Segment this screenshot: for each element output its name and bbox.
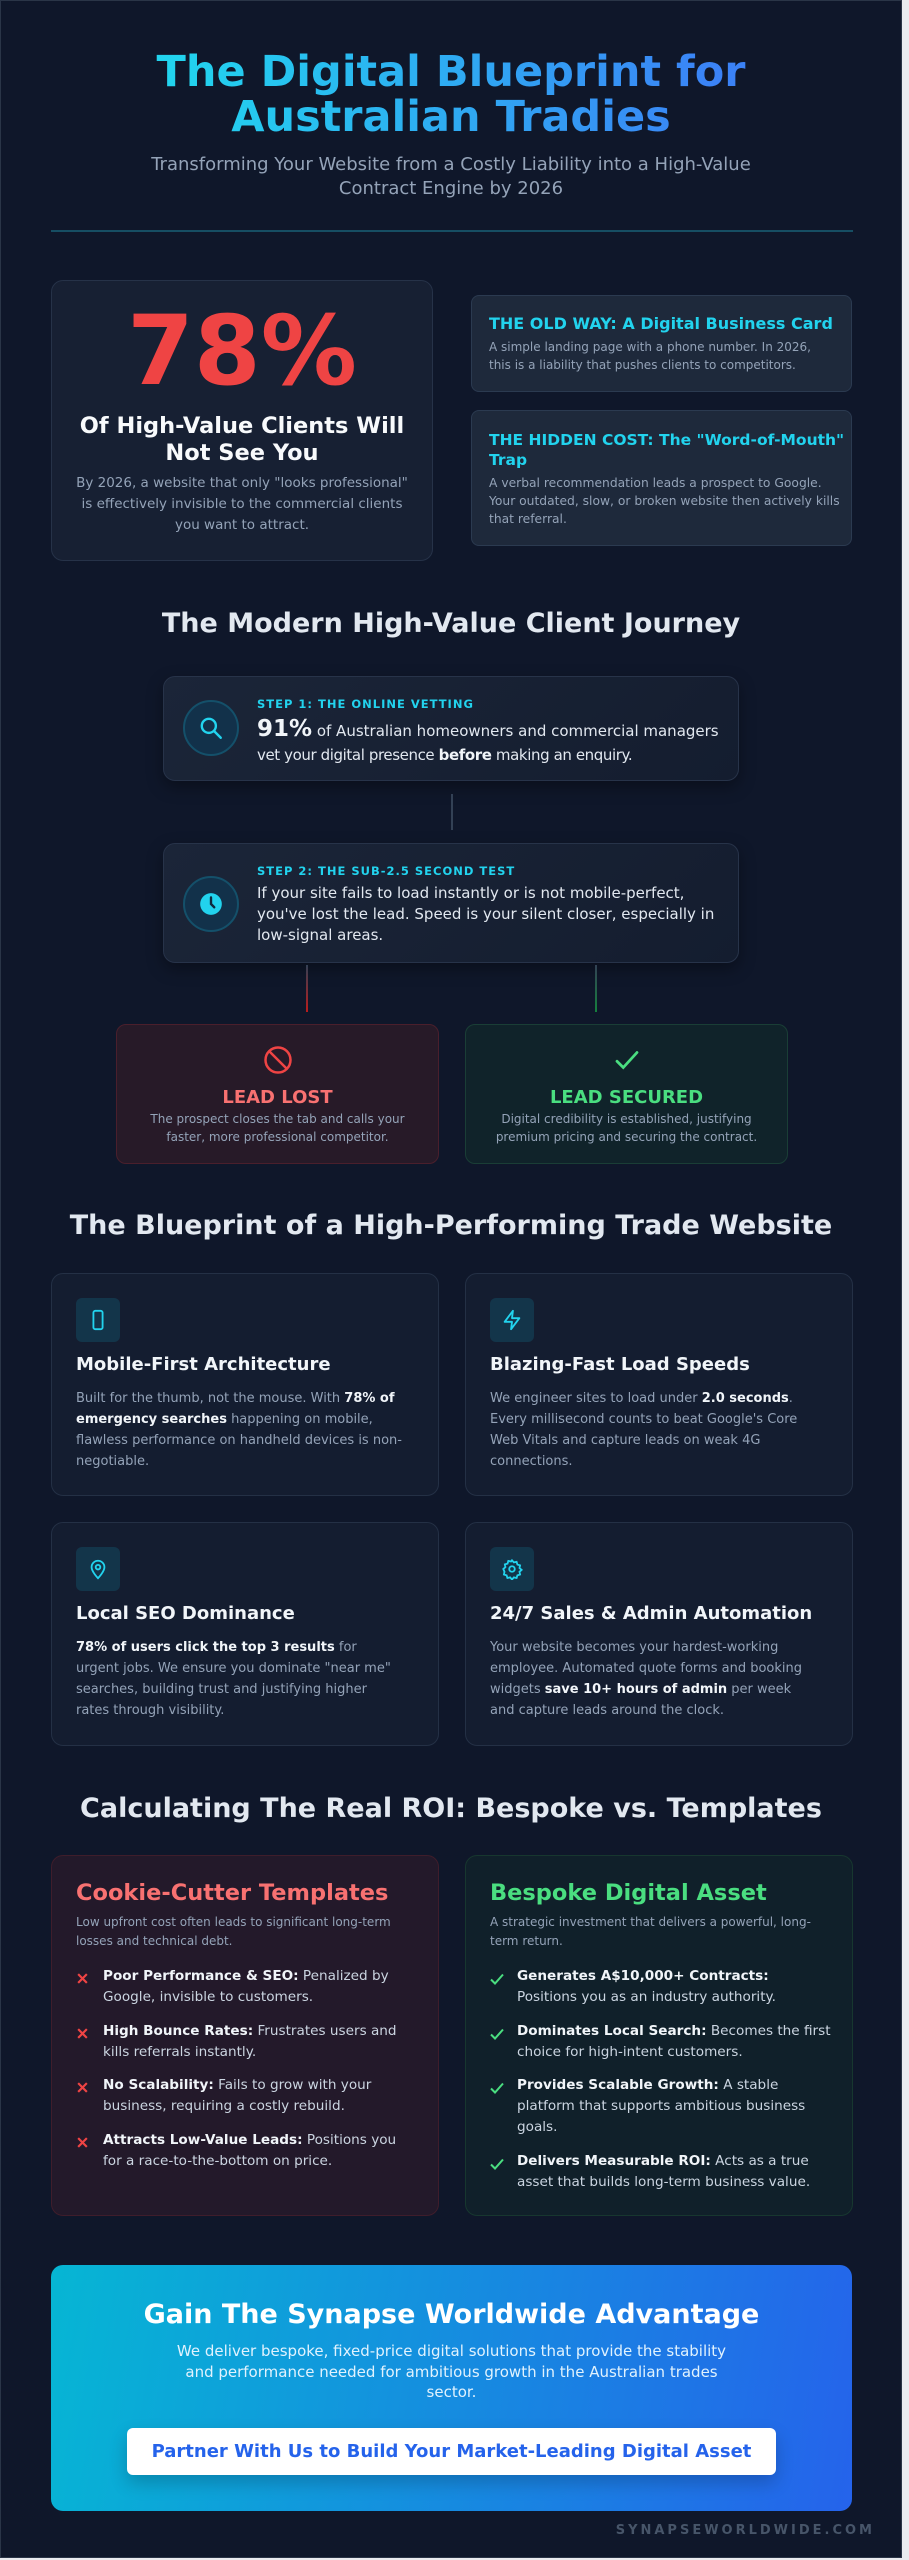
step 2 text: you've lost the lead. Speed is your silent closer, especially in: [257, 905, 714, 923]
speed text: Every millisecond counts to beat Google's Core: [490, 1412, 797, 1427]
stat heading: [80, 413, 404, 466]
lead secured text: [496, 1112, 757, 1144]
stat heading: Of High-Value Clients Will: [80, 413, 404, 439]
speed text: We engineer sites to load under 2.0 seconds.: [490, 1391, 793, 1406]
panel: templates: [51, 1855, 439, 2216]
mobile text: Built for the thumb, not the mouse. With 78% of: [76, 1391, 395, 1406]
hidden cost text: A verbal recommendation leads a prospect to Google.: [489, 476, 822, 490]
mobile text: [76, 1391, 402, 1469]
speed title: Blazing-Fast Load Speeds: [490, 1354, 750, 1375]
templates subtitle: losses and technical debt.: [76, 1934, 232, 1948]
big stat: 78%: [127, 295, 357, 407]
seo text: 78% of users click the top 3 results for: [76, 1640, 357, 1655]
arrow: to lead lost: [306, 965, 308, 1012]
templates list: kills referrals instantly.: [103, 2044, 256, 2060]
icon: search: [183, 700, 239, 756]
bespoke list: choice for high-intent customers.: [517, 2044, 743, 2060]
title: Australian Tradies: [231, 92, 671, 142]
cta button: [127, 2428, 776, 2475]
seo text: searches, building trust and justifying higher: [76, 1682, 367, 1697]
templates list: Poor Performance & SEO: Penalized by: [103, 1968, 389, 1984]
cta text: sector.: [427, 2383, 476, 2401]
old way text: this is a liability that pushes clients to competitors.: [489, 358, 796, 372]
step 2 text: low-signal areas.: [257, 926, 383, 944]
panel: lead secured: [465, 1024, 788, 1164]
old way text: A simple landing page with a phone number. In 2026,: [489, 340, 811, 354]
hidden cost text: [489, 476, 840, 526]
lead lost text: The prospect closes the tab and calls your: [150, 1112, 405, 1126]
panel: bespoke: [465, 1855, 853, 2216]
automation text: [490, 1640, 802, 1718]
bespoke subtitle: A strategic investment that delivers a powerful, long-: [490, 1915, 811, 1929]
speed text: connections.: [490, 1454, 573, 1469]
hidden cost heading: THE HIDDEN COST: The "Word-of-Mouth": [489, 431, 844, 449]
icon: check: [616, 1051, 638, 1070]
step 1 label: STEP 1: THE ONLINE VETTING: [257, 697, 474, 711]
mobile text: negotiable.: [76, 1454, 149, 1469]
automation text: Your website becomes your hardest-working: [490, 1640, 778, 1655]
hidden cost text: that referral.: [489, 512, 567, 526]
icon: gear: [490, 1547, 534, 1591]
panel: step 2: [163, 843, 739, 963]
footer: SYNAPSEWORLDWIDE.COM: [616, 2523, 875, 2538]
templates list: for a race-to-the-bottom on price.: [103, 2152, 332, 2168]
panel: call to action: [51, 2265, 852, 2511]
title: The Digital Blueprint for: [157, 47, 745, 97]
automation text: and capture leads around the clock.: [490, 1703, 724, 1718]
templates list: No Scalability: Fails to grow with your: [103, 2077, 371, 2093]
templates list: [78, 1968, 397, 2168]
seo text: [76, 1640, 391, 1718]
cta text: We deliver bespoke, fixed-price digital solutions that provide the stability: [177, 2342, 726, 2360]
bespoke list: Dominates Local Search: Becomes the first: [517, 2022, 831, 2038]
old way text: [489, 340, 811, 372]
templates subtitle: Low upfront cost often leads to significant long-term: [76, 1915, 391, 1929]
stat text: By 2026, a website that only "looks professional": [76, 475, 408, 491]
lead lost text: faster, more professional competitor.: [166, 1130, 389, 1144]
templates list: business, requiring a costly rebuild.: [103, 2098, 345, 2114]
title: [1, 50, 901, 140]
stat text: you want to attract.: [175, 517, 309, 533]
hidden cost heading: Trap: [489, 451, 527, 469]
cta button: Partner With Us to Build Your Market-Leading Digital Asset: [152, 2441, 751, 2462]
bespoke list: Delivers Measurable ROI: Acts as a true: [517, 2152, 809, 2168]
bespoke list: Generates A$10,000+ Contracts:: [517, 1968, 769, 1984]
bespoke subtitle: term return.: [490, 1934, 563, 1948]
heading: blueprint: The Blueprint of a High-Performing Trade Website: [70, 1210, 832, 1241]
icon: bolt: [490, 1298, 534, 1342]
lead lost text: [150, 1112, 405, 1144]
speed text: [490, 1391, 797, 1469]
old way heading: THE OLD WAY: A Digital Business Card: [489, 314, 833, 333]
panel: old way: [471, 295, 852, 392]
lead secured title: LEAD SECURED: [550, 1087, 703, 1108]
cta heading: Gain The Synapse Worldwide Advantage: [144, 2299, 759, 2330]
automation text: employee. Automated quote forms and booking: [490, 1661, 802, 1676]
heading: client journey: The Modern High-Value Client Journey: [162, 608, 740, 639]
templates subtitle: [76, 1915, 391, 1948]
panel: local seo: [51, 1522, 439, 1746]
mobile text: emergency searches happening on mobile,: [76, 1412, 373, 1427]
icon: pin: [76, 1547, 120, 1591]
seo title: Local SEO Dominance: [76, 1603, 295, 1624]
bespoke list: Positions you as an industry authority.: [517, 1989, 776, 2005]
speed text: Web Vitals and capture leads on weak 4G: [490, 1433, 760, 1448]
icon: clock: [183, 876, 239, 932]
bespoke list: goals.: [517, 2119, 557, 2135]
panel: lead lost: [116, 1024, 439, 1164]
automation title: 24/7 Sales & Admin Automation: [490, 1603, 812, 1624]
templates title: Cookie-Cutter Templates: [76, 1880, 388, 1906]
stat text: [76, 475, 408, 533]
step 1 text: [257, 716, 719, 764]
lead lost title: LEAD LOST: [222, 1087, 333, 1108]
heading: roi: Calculating The Real ROI: Bespoke vs. Templates: [80, 1793, 822, 1824]
step 2 label: STEP 2: THE SUB-2.5 SECOND TEST: [257, 864, 515, 878]
arrow: connector: [451, 794, 453, 830]
icon: ban: [264, 1046, 292, 1074]
mobile text: flawless performance on handheld devices is non-: [76, 1433, 402, 1448]
hidden cost heading: [489, 431, 844, 469]
panel: hidden cost: [471, 410, 852, 546]
step 2 text: If your site fails to load instantly or is not mobile-perfect,: [257, 884, 684, 902]
panel: step 1: [163, 676, 739, 781]
panel: mobile-first: [51, 1273, 439, 1496]
templates list: Attracts Low-Value Leads: Positions you: [103, 2132, 396, 2148]
seo text: urgent jobs. We ensure you dominate "near me": [76, 1661, 391, 1676]
bespoke list: Provides Scalable Growth: A stable: [517, 2077, 778, 2093]
subtitle: [151, 154, 751, 199]
templates list: High Bounce Rates: Frustrates users and: [103, 2022, 397, 2038]
stat heading: Not See You: [165, 440, 319, 466]
subtitle: Contract Engine by 2026: [339, 178, 563, 199]
panel: automation: [465, 1522, 853, 1746]
panel: 78% stat: [51, 280, 433, 561]
bespoke title: Bespoke Digital Asset: [490, 1880, 767, 1906]
cta text: and performance needed for ambitious growth in the Australian trades: [185, 2362, 718, 2380]
arrow: to lead secured: [595, 965, 597, 1012]
step 1 text: 91% of Australian homeowners and commercial managers: [257, 716, 719, 742]
icon: phone: [76, 1298, 120, 1342]
lead secured text: Digital credibility is established, justifying: [501, 1112, 752, 1126]
step 1 text: vet your digital presence before making an enquiry.: [257, 746, 632, 764]
bespoke list: [490, 1968, 831, 2190]
cta text: [177, 2342, 726, 2401]
seo text: rates through visibility.: [76, 1703, 224, 1718]
bespoke list: platform that supports ambitious business: [517, 2098, 805, 2114]
subtitle: Transforming Your Website from a Costly Liability into a High-Value: [151, 154, 751, 175]
stat text: is effectively invisible to the commercial clients: [82, 496, 402, 512]
lead secured text: premium pricing and securing the contract.: [496, 1130, 757, 1144]
automation text: widgets save 10+ hours of admin per week: [490, 1682, 791, 1697]
bespoke subtitle: [490, 1915, 811, 1948]
bespoke list: asset that builds long-term business value.: [517, 2174, 810, 2190]
panel: load speeds: [465, 1273, 853, 1496]
templates list: Google, invisible to customers.: [103, 1989, 313, 2005]
step 2 text: [257, 884, 714, 944]
mobile title: Mobile-First Architecture: [76, 1354, 331, 1375]
hidden cost text: Your outdated, slow, or broken website then actively kills: [489, 494, 840, 508]
